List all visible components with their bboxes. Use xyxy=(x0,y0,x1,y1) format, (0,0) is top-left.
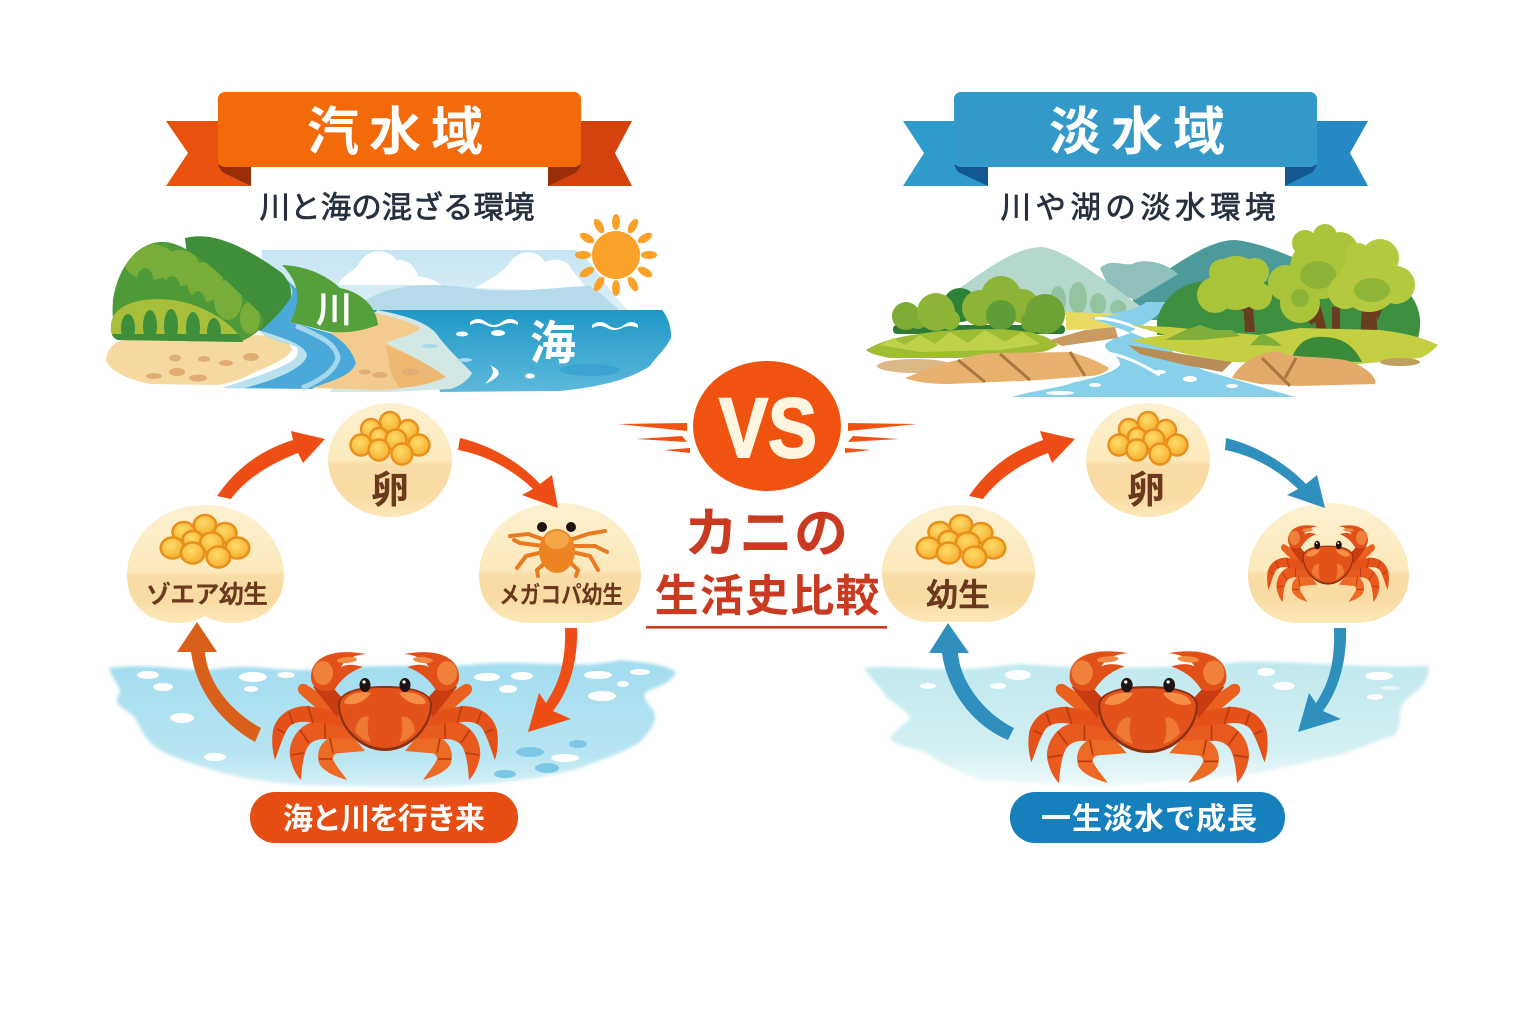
icon: adult crab xyxy=(1028,651,1268,783)
node: egg xyxy=(1086,403,1210,517)
panel: VS center xyxy=(618,361,917,629)
arrow: zoea to egg xyxy=(217,431,325,499)
node: zoea larva xyxy=(127,505,284,623)
VS badge: VS xyxy=(719,381,817,475)
illustration: freshwater pool xyxy=(864,662,1429,787)
illustration: estuary landscape xyxy=(105,214,671,392)
ribbon: brackish water title: 汽水域 xyxy=(307,104,483,162)
main title line 1: カニの xyxy=(684,504,848,564)
back trees left xyxy=(892,276,1065,334)
subtitle: freshwater environment: 川や湖の淡水環境 xyxy=(1000,191,1276,225)
node: larva xyxy=(882,505,1035,622)
hill body xyxy=(112,242,264,342)
node: egg: 卵 xyxy=(1127,470,1165,512)
speed lines left xyxy=(618,423,690,453)
freshwater highlights xyxy=(920,668,1400,700)
pill: grows entirely in freshwater xyxy=(1010,792,1285,843)
arrow: egg to juvenile xyxy=(1225,438,1325,508)
icon: small crab xyxy=(1267,525,1389,602)
arrow: juvenile to adult xyxy=(1298,628,1346,732)
arrow: adult to zoea xyxy=(177,622,261,742)
pill: migrates between sea and river: 海と川を行き来 xyxy=(283,803,485,836)
node: larva: 幼生 xyxy=(926,577,990,613)
arrow: adult to larva xyxy=(929,623,1014,740)
river xyxy=(223,277,356,389)
panel: brackish water xyxy=(105,92,676,843)
title underline xyxy=(646,626,887,629)
panel: freshwater xyxy=(864,92,1438,843)
arrow: megalopa to adult xyxy=(528,628,577,732)
label: river: 川 xyxy=(316,289,352,330)
speed lines right xyxy=(845,423,917,453)
icon: adult crab xyxy=(272,652,498,780)
pill: grows entirely in freshwater: 一生淡水で成長 xyxy=(1041,803,1257,836)
icon: sun xyxy=(575,214,657,296)
label: sea: 海 xyxy=(530,317,576,369)
arrow: egg to megalopa xyxy=(458,438,558,508)
icon: megalopa xyxy=(510,522,607,576)
node: egg: 卵 xyxy=(371,470,409,512)
node: zoea larva: ゾエア幼生 xyxy=(146,581,268,609)
main title line 2: 生活史比較 xyxy=(654,572,880,621)
ribbon: freshwater title xyxy=(903,92,1368,186)
node: megalopa larva: メガコパ幼生 xyxy=(499,582,623,609)
illustration: river landscape xyxy=(866,224,1438,397)
node: megalopa larva xyxy=(479,503,641,623)
ribbon: freshwater title: 淡水域 xyxy=(1049,104,1225,162)
pill: migrates between sea and river xyxy=(250,792,518,843)
VS badge xyxy=(693,361,841,491)
illustration: brackish water pool xyxy=(109,660,676,787)
water highlights xyxy=(137,669,650,762)
subtitle: brackish environment: 川と海の混ざる環境 xyxy=(260,191,534,225)
node: egg xyxy=(328,403,452,517)
ribbon: brackish water title xyxy=(166,92,632,186)
back trees right xyxy=(1157,280,1420,338)
node: juvenile crab xyxy=(1248,503,1409,623)
arrow: larva to egg xyxy=(969,431,1075,499)
